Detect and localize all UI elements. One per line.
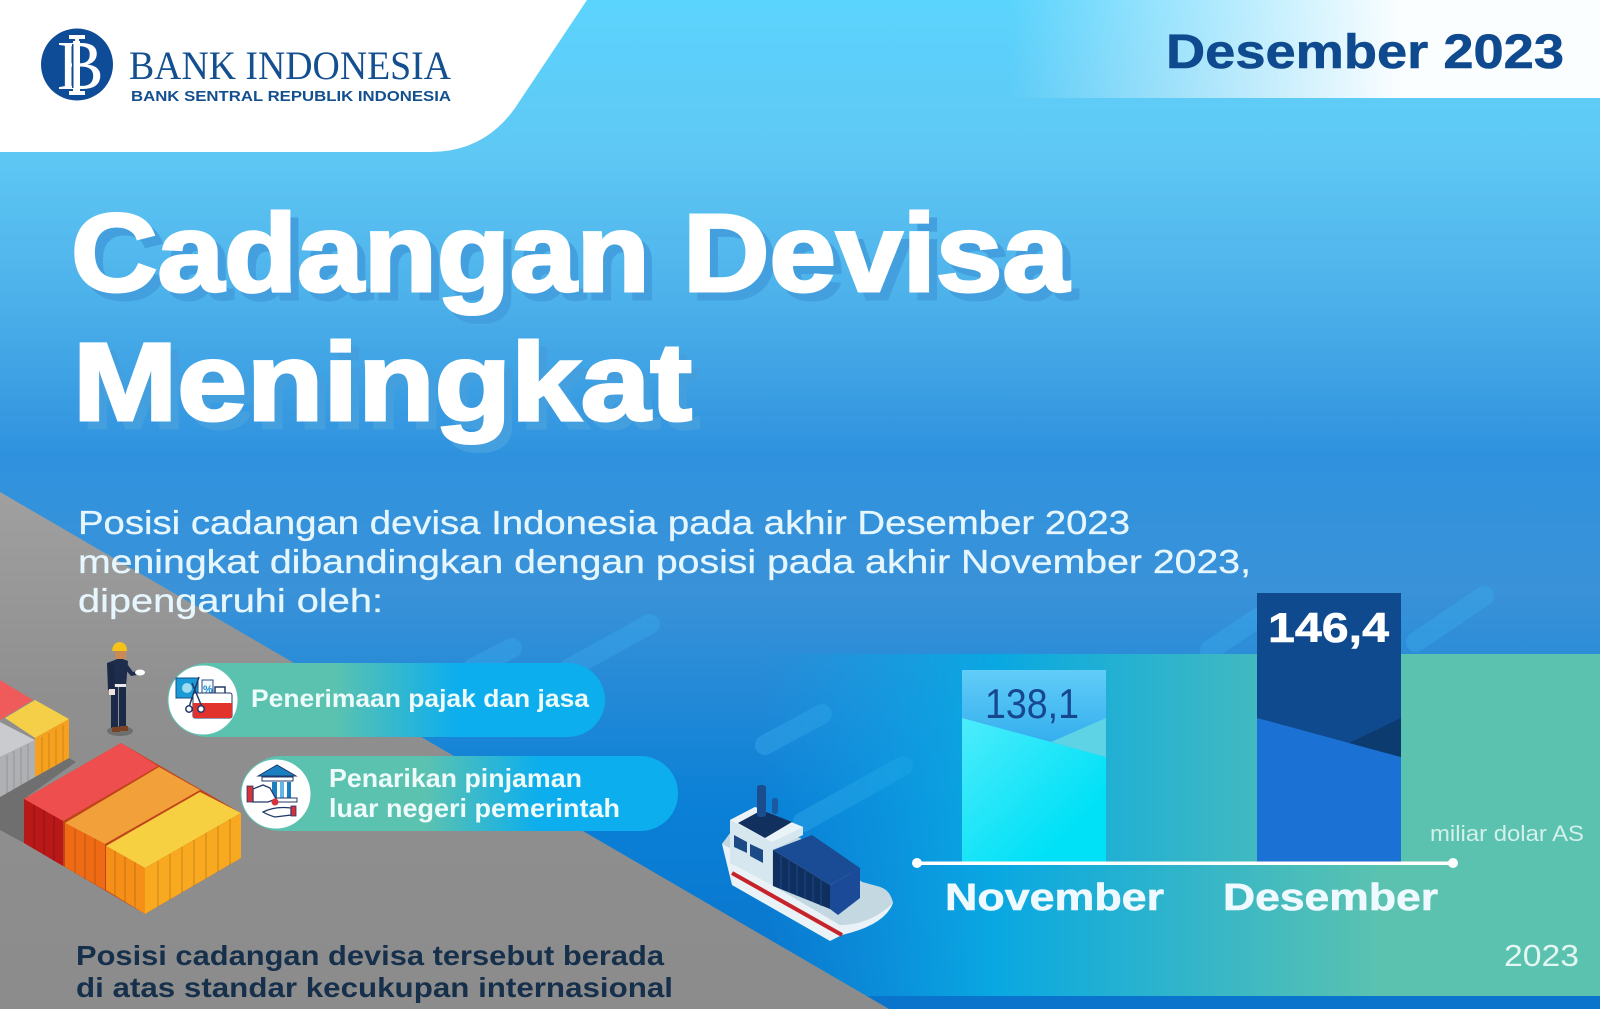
intro paragraph: Posisi cadangan devisa Indonesia pada akhir Desember 2023	[78, 504, 1130, 541]
icon: government loan	[241, 759, 311, 829]
bar: Desember: 146,4	[1268, 604, 1390, 651]
logo tagline: BANK SENTRAL REPUBLIK INDONESIA	[131, 88, 451, 105]
title: Meningkat	[73, 321, 692, 444]
band behind chart	[700, 654, 1600, 996]
bar: November	[962, 670, 1106, 862]
title: Cadangan Devisa	[71, 192, 1070, 315]
unit label: miliar dolar AS	[1430, 821, 1584, 846]
bar chart	[912, 593, 1584, 973]
decorative streaks	[473, 596, 1484, 822]
title	[71, 192, 1078, 452]
logo emblem: B	[57, 28, 104, 105]
axis label: November: November	[945, 877, 1164, 919]
top right banner	[1010, 0, 1600, 98]
period label: Desember 2023	[1166, 26, 1564, 79]
item: Penerimaan pajak dan jasa	[168, 663, 605, 737]
icon: worker	[107, 642, 145, 736]
item: Penarikan pinjaman luar negeri pemerintah: luar negeri pemerintah	[329, 793, 620, 823]
intro paragraph: dipengaruhi oleh:	[78, 582, 383, 619]
icon: shipping containers large stack	[24, 743, 241, 914]
closing statement: di atas standar kecukupan internasional	[76, 972, 673, 1003]
closing statement: Posisi cadangan devisa tersebut berada	[76, 940, 664, 971]
intro paragraph	[78, 504, 1251, 619]
closing statement	[76, 940, 673, 1003]
icon: shipping containers small stack	[0, 680, 76, 843]
year label: 2023	[1504, 938, 1579, 973]
item: Penarikan pinjaman luar negeri pemerintah: Penarikan pinjaman	[329, 763, 582, 793]
intro paragraph: meningkat dibandingkan dengan posisi pada akhir November 2023,	[78, 543, 1251, 580]
axis label: Desember: Desember	[1223, 877, 1438, 919]
title: Cadangan Devisa	[79, 200, 1078, 323]
item: Penarikan pinjaman luar negeri pemerintah	[241, 756, 678, 831]
bar: November: 138,1	[985, 680, 1079, 727]
bar: Desember	[1257, 593, 1401, 862]
icon: tax and services: %	[203, 684, 213, 696]
grey quay	[0, 492, 889, 1009]
header logo panel	[0, 0, 587, 152]
item: Penerimaan pajak dan jasa: Penerimaan pajak dan jasa	[251, 685, 590, 713]
logo wordmark: BANK INDONESIA	[129, 43, 451, 88]
icon: tax and services	[168, 665, 238, 735]
icon: cargo ship	[722, 785, 893, 941]
axis line	[912, 858, 1458, 868]
logo emblem	[41, 28, 113, 105]
title: Meningkat	[81, 329, 700, 452]
